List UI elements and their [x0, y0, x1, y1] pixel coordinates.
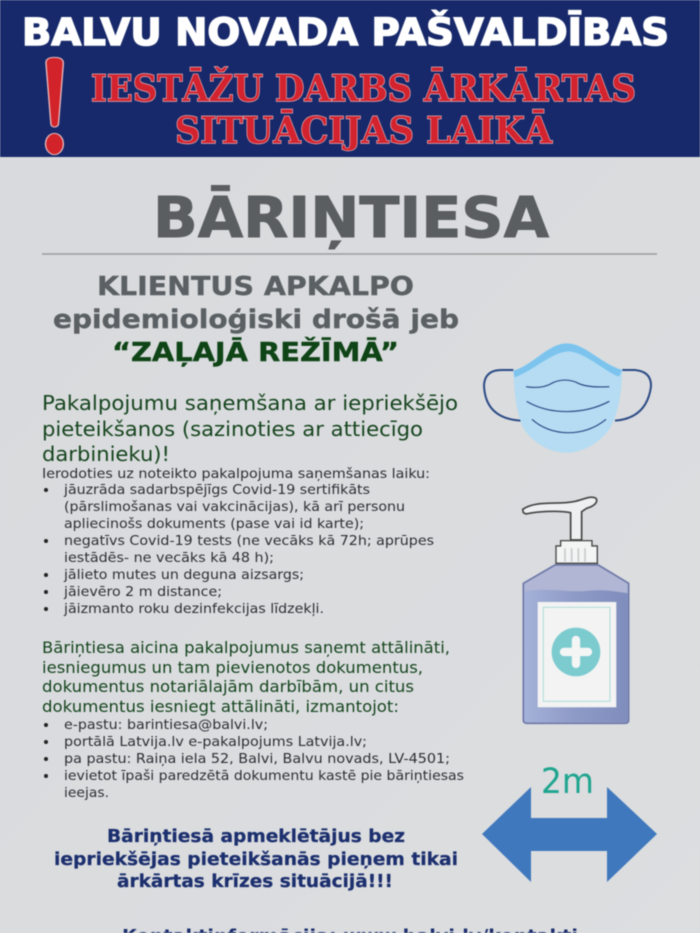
text block: remote services: dokumentus notariālajām darbībām, un citus [42, 677, 414, 696]
subheading: green mode: “ZAĻAJĀ REŽĪMĀ” [112, 336, 399, 368]
header title: municipality: BALVU NOVADA PAŠVALDĪBAS [22, 10, 669, 54]
requirements list: (pārslimošanas vai vakcinācijas), kā arī personu [64, 499, 405, 515]
text block: remote services: Bāriņtiesa aicina pakalpojumus saņemt attālināti, [42, 638, 450, 657]
text block: service by appointment: Pakalpojumu saņemšana ar iepriekšējo [42, 391, 458, 415]
callout: crisis visits only: iepriekšējas pieteikšanās pieņem tikai [54, 849, 458, 870]
label: 2m: 2m [541, 762, 594, 802]
submission channels list: ieejas. [64, 785, 109, 801]
callout: crisis visits only: Bāriņtiesā apmeklētājus bez [107, 826, 405, 847]
requirements list: jālieto mutes un deguna aizsargs; [63, 567, 304, 583]
subheading: green mode: KLIENTUS APKALPO [97, 272, 414, 302]
submission channels list: portālā Latvija.lv e-pakalpojums Latvija.lv; [64, 734, 367, 750]
subheading: green mode [53, 272, 459, 368]
pump nozzle [523, 497, 597, 540]
text block: remote services: dokumentus iesniegt attālināti, izmantojot: [42, 697, 399, 716]
submission channels list: e-pastu: barintiesa@balvi.lv; [64, 717, 268, 733]
bottle body [523, 565, 629, 723]
main heading: BĀRIŅTIESA [153, 186, 550, 251]
requirements list: iestādēs- ne vecāks kā 48 h); [64, 550, 274, 566]
submission channels list: ievietot īpaši paredzētā dokumentu kastē pie bāriņtiesas [64, 768, 464, 784]
bottle label [538, 602, 616, 707]
requirements list: jāievēro 2 m distance; [63, 584, 222, 600]
distance marker [482, 762, 657, 882]
text block: remote services: iesniegumus un tam pievienotos dokumentus, [42, 658, 423, 677]
callout: crisis visits only [54, 826, 458, 892]
bottle cap [556, 541, 597, 563]
header subtitle: red text: IESTĀŽU DARBS ĀRKĀRTAS [91, 68, 636, 110]
requirements list: jāizmanto roku dezinfekcijas līdzekļi. [63, 601, 324, 617]
callout: crisis visits only: ārkārtas krīzes situācijā!!! [117, 871, 393, 892]
subheading: green mode: epidemioloģiski drošā jeb [53, 305, 459, 335]
requirements list: jāuzrāda sadarbspējīgs Covid-19 sertifikāts [63, 482, 370, 498]
requirements list: negatīvs Covid-19 tests (ne vecāks kā 72h; aprūpes [64, 533, 434, 549]
text block: service by appointment: pieteikšanos (sazinoties ar attiecīgo [42, 417, 423, 441]
icon: red exclamation mark [46, 57, 63, 155]
submission channels list: pa pastu: Raiņa iela 52, Balvi, Balvu novads, LV-4501; [64, 751, 450, 767]
icon: hand sanitizer bottle [523, 497, 629, 723]
requirements list: Ierodoties uz noteikto pakalpojuma saņemšanas laiku: [42, 466, 430, 482]
arrow: double-headed [482, 787, 657, 882]
text block: remote services [42, 638, 450, 716]
requirements list: apliecinošs dokuments (pase vai id karte); [64, 516, 364, 532]
submission channels list [44, 717, 464, 801]
text block: service by appointment: darbinieku)! [42, 442, 170, 466]
header banner [0, 0, 700, 157]
icon: face mask [484, 343, 651, 453]
header subtitle: red text: SITUĀCIJAS LAIKĀ [175, 110, 553, 152]
text block: service by appointment [42, 391, 458, 466]
requirements list [42, 466, 434, 617]
header subtitle: red text [91, 68, 636, 152]
